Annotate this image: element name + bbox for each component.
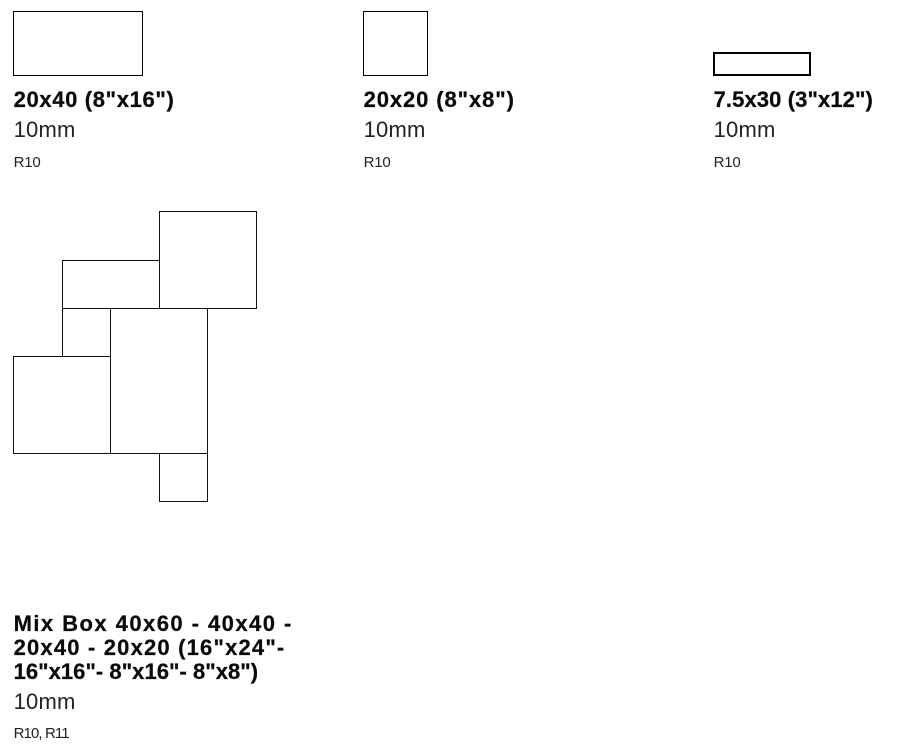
thickness: 20x40: 10mm xyxy=(14,117,76,142)
diagram: mix box layout xyxy=(13,211,257,502)
slip rating: mix box: R10, R11 xyxy=(14,725,69,742)
slip rating: 7.5x30: R10 xyxy=(714,154,741,171)
icon: 7.5x30 strip xyxy=(713,52,811,76)
heading: mix box sizes: 16"x16"- 8"x16"- 8"x8") xyxy=(14,659,258,684)
panel: 7.5x30 tile xyxy=(713,52,873,171)
slip rating: 20x40: R10 xyxy=(14,154,41,171)
panel: 20x40 tile xyxy=(13,11,174,171)
thickness: mix box: 10mm xyxy=(14,689,76,714)
heading: mix box sizes: 20x40 - 20x20 (16"x24"- xyxy=(14,635,285,660)
icon: 20x40 rectangle xyxy=(13,11,143,76)
heading: 20x20 size: 20x20 (8"x8") xyxy=(364,87,515,112)
heading: mix box sizes: Mix Box 40x60 - 40x40 - xyxy=(14,611,293,636)
icon: 20x20 square xyxy=(363,11,428,76)
heading: mix box sizes xyxy=(14,611,293,684)
heading: 7.5x30 size: 7.5x30 (3"x12") xyxy=(714,87,873,112)
thickness: 20x20: 10mm xyxy=(364,117,426,142)
panel: 20x20 tile xyxy=(363,11,515,171)
slip rating: 20x20: R10 xyxy=(364,154,391,171)
panel: mix box xyxy=(13,211,293,742)
heading: 20x40 size: 20x40 (8"x16") xyxy=(14,87,174,112)
thickness: 7.5x30: 10mm xyxy=(714,117,776,142)
